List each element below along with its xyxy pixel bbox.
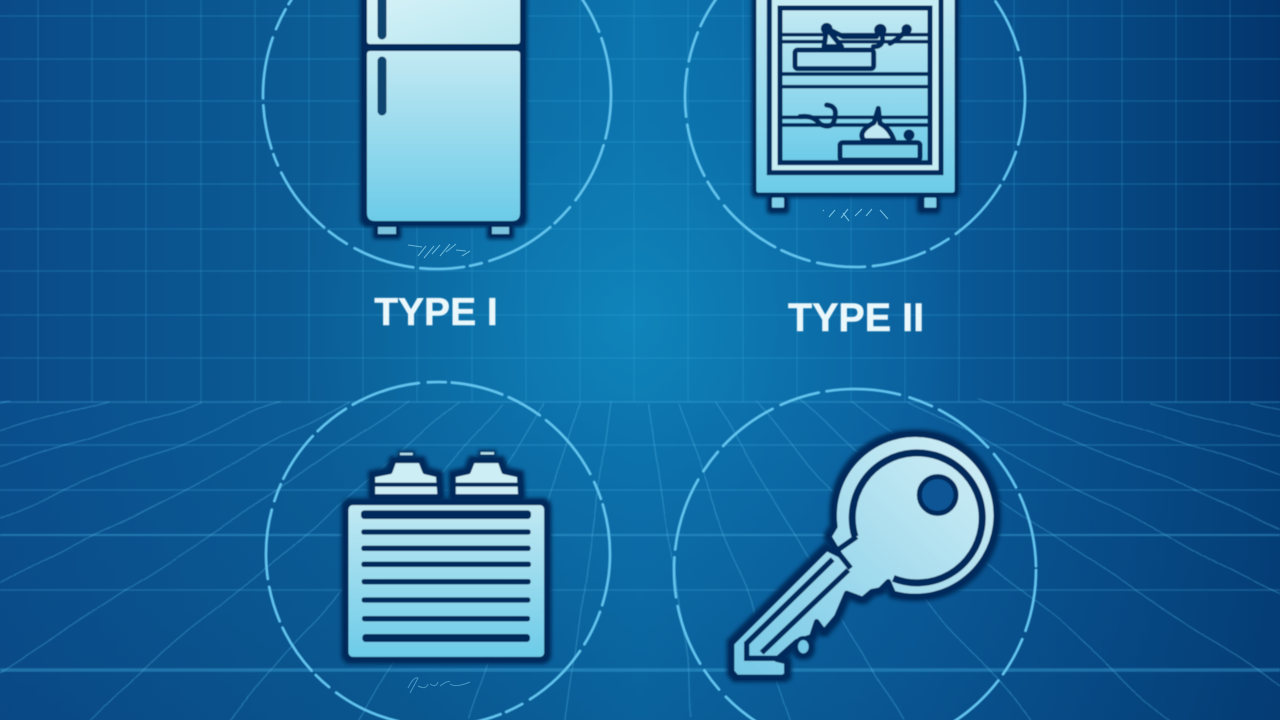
dashed circle: Type I <box>263 0 611 269</box>
refrigerator feet <box>375 224 512 237</box>
radiator slats <box>361 510 531 642</box>
oven feet <box>769 195 938 212</box>
cap bands <box>373 479 520 491</box>
key hole <box>919 477 956 513</box>
refrigerator main door <box>367 51 520 221</box>
refrigerator handles <box>378 0 386 111</box>
lower tray <box>840 143 920 160</box>
scribble under oven <box>823 209 888 221</box>
shelf rails <box>782 35 928 125</box>
upper food shape <box>823 25 909 47</box>
cap tips <box>400 450 494 457</box>
key body <box>732 434 996 677</box>
icon: key <box>732 434 996 677</box>
label: Type I: TYPE I <box>374 291 498 334</box>
scribble under radiator <box>408 678 470 693</box>
oven inner cavity <box>780 8 930 163</box>
icon: oven with shelves <box>755 0 956 212</box>
oven body <box>755 0 956 194</box>
radiator body <box>346 503 547 659</box>
lower food shape <box>800 105 912 141</box>
oven door frame <box>769 0 941 173</box>
label: Type II: TYPE II <box>788 296 924 340</box>
radiator right cap <box>453 461 521 497</box>
dashed circle: Type II <box>685 0 1025 267</box>
key neck lines <box>837 537 857 568</box>
radiator left cap <box>373 461 440 497</box>
dashed circle: radiator <box>266 382 610 720</box>
key shaft groove <box>747 559 848 658</box>
refrigerator freezer door <box>367 0 520 44</box>
icon: radiator <box>346 453 547 659</box>
dashed circle: key <box>674 389 1036 720</box>
key inner ring <box>852 453 982 583</box>
upper tray <box>795 50 874 69</box>
icon: refrigerator <box>362 0 525 237</box>
scribble under refrigerator <box>408 244 470 258</box>
key tooth <box>796 638 811 655</box>
